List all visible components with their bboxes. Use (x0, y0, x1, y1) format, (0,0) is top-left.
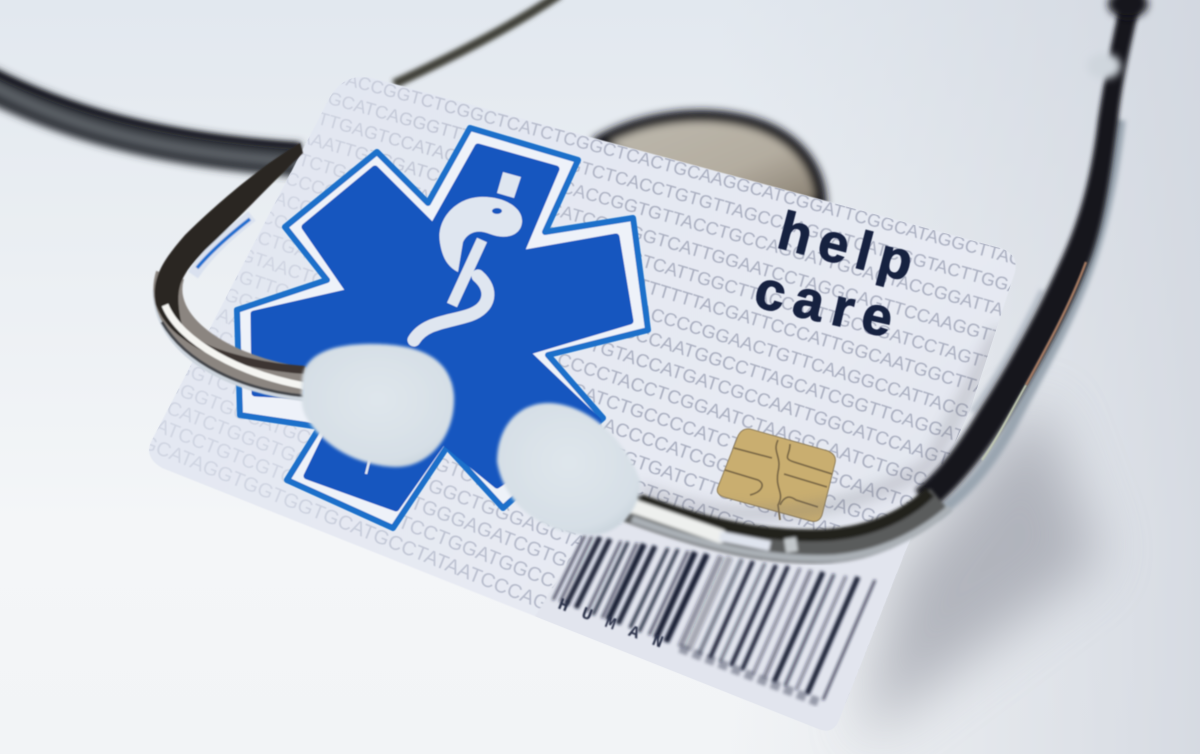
left ear tip (301, 344, 454, 467)
rod of asclepius (452, 240, 482, 305)
gold chip (717, 429, 835, 521)
left U-shaped metal tube (155, 143, 305, 398)
lower tube body (168, 275, 305, 382)
brand text: help care: help (772, 201, 927, 295)
tube shadow on card (640, 330, 1000, 514)
copper reflection (1026, 262, 1086, 385)
upper dark tube (155, 143, 303, 342)
green reflection (982, 385, 1026, 460)
right stethoscope tube (628, 0, 1148, 558)
silver outer edge of right tube (935, 120, 1120, 515)
barcode label: HUMAN (555, 596, 679, 659)
star of life emblem (237, 128, 648, 528)
DNA letter pattern: GTTCAGCATTGATCGTTGAGTCCATAGCATCTCGTTCACCGGTGTTACCTGCCAGGATTGCAGTACCGGATTAGGCAT (139, 59, 1066, 337)
card shadow on surface (860, 400, 1100, 740)
DNA letter pattern: CGTAGGTCATCGGGTTCACCGGTCTCGGCTCATCTCGGCTCACTGCAAGGCATCGGATTCGGCATAGGCTTACGGTA (139, 15, 1072, 283)
DNA letter pattern: GGATCCATTGGAGTCTGGAGTCTATAAAATTGTCTATTCGATGTCATTGGCTTACCAATTGCGGATCCTAGTTGCACT (139, 103, 1056, 392)
DNA letter pattern: CATGGAGTGTAACTCCTGGCCATCTCCTGAACTCCCCCTACCTCGGAATCTAAGGCAATCTGGCATTACGGTTCCAAG (139, 211, 1098, 546)
lower silver edge (156, 290, 305, 398)
back stethoscope tube left (0, 0, 560, 162)
DNA letter pattern: CAGTATCGCATATAAAATTGTCGATCGTTGAGTCCCATCGATGGTCATTGGAATCCTAGGCAGTTCCAAGGTTACGGC (139, 81, 1067, 366)
DNA letter pattern: TCTGGCAATGGTGTGAATACGGGAGCTATGGTGTGAACTGTGATCTTCAGGTCTAATCGCCTGGAACATTCCGAGG (138, 278, 1082, 628)
DNA letter pattern (149, 77, 1016, 702)
DNA letter pattern: CTGGGTGGCATGCCTCATGATCTGGCTGGGAGCTAGGCATTCAGTACGGTCATCCGAATTGCGG (138, 365, 951, 693)
snake body (414, 276, 488, 340)
DNA letter pattern: GCATAGGTGGTGGTGCATGCCTATAATCCCAGCTAGGCATTCGGTCCAATGC (138, 431, 806, 718)
DNA letter pattern: GATCCTGTCGTGGTGGGATCTCCTGGATGGCCATGCCTGTGTGCAGTCATTGGTCC (138, 409, 862, 713)
brand text: help care (749, 201, 927, 351)
stethoscope chest piece behind card (598, 116, 821, 205)
tube dark top band (186, 336, 305, 370)
dark tapered right tube (915, 0, 1142, 510)
right ear tip (497, 403, 640, 535)
barcode (553, 535, 875, 700)
star outer outline (237, 128, 648, 528)
DNA letter pattern: GTCATCTGGGTGCCATGGAGCTGGGAGATCGTGGAGCCGGTCCAATTGGCAGTTACGATC (138, 387, 912, 705)
back stethoscope thin tube (394, 0, 560, 84)
blurred barcode digits (680, 648, 818, 702)
DNA letter pattern: GGATCTGGGAGTGCTCAGAATGTGGGAGTCTGTGTGAATCTGTGTCAGGATTCGGCACTGCAATTAGCCATGG (138, 322, 1057, 675)
barcode quiet zone (538, 524, 906, 712)
tube dark bottom band (162, 322, 305, 396)
tube highlight (165, 305, 305, 386)
DNA letter pattern: GGCATTACCTCCGCCTCTAACCCTGACCGGAATTTTTTTGCCCAATGGCCTTAGCATCGGTTCAGGATCCTAACGTTG (139, 168, 1088, 485)
DNA letter pattern: TCATGCAGATGCCCCGGCTGGCTTGGAGTCTGGCTATTCTATTTTTTACGATTCCCATTGGCAATGGCTTACCGTAAG (139, 124, 1075, 425)
DNA letter pattern: ATCGGTCTGGGAGGTGTGATCAGGTCTGGGAGATCTGTCGAAATGCAATCATTGCTAAGCATTGGCAG (138, 343, 998, 682)
blue reflection (193, 216, 252, 275)
DNA letter pattern: GGCATATGGTGTGAACTGTGAGAGGATGGTTGAGTGAACCCCATCGGTACAATCTCAGGCATCCAGTTAACGGTCCAA (138, 256, 1112, 608)
snake head (439, 197, 522, 272)
health card (149, 77, 1016, 730)
star blue fill (254, 147, 630, 508)
brand text: help care: care (749, 259, 908, 351)
DNA letter pattern: ATGGCATTCAGGCATAGCATCAGGGTTTCACCTCTGGTCTCACCTGTGTTAGCCAAGGATCATCGGTACTTGGACCAT (139, 37, 1068, 310)
DNA letter pattern: TTAGCATCTCCTGAGTCCCCCACCTCCGCCTCTAAGTTGTACCATGATCGCCAATTGGCATCCAAGTTACGTGCATCG (139, 189, 1086, 513)
rod bottom fragment (366, 458, 370, 474)
card body (149, 77, 1016, 730)
snake eye (492, 208, 502, 214)
DNA letter pattern: CTAGGGCTCTCAGAAATGCAAGGGCTCTCAGGAATACGGCTGTGATCTGGCTCTTAAGCATCCTTGGAATCCAG (138, 300, 1065, 651)
top dark blob (1108, 0, 1148, 18)
front lower tube section (628, 492, 950, 558)
rod top segment (497, 172, 521, 198)
ferrule ring (1087, 53, 1121, 79)
silver inner edge of right tube (972, 290, 1042, 412)
DNA letter pattern: AGTCCATGGTTGAGTGTGAACAGTGGTGTAACTCCCATCTGCCCCATCTAAGCTTGGCAACTGGATCCGGTATTACCA (139, 233, 1096, 574)
DNA letter pattern: ACTGGTACCTGACCGGAATTCCATGCCCCGGCTAATTTTTTTACCCCGGAACTGTTCAAGGCCATTACGGTCTTAGCA (139, 146, 1080, 455)
